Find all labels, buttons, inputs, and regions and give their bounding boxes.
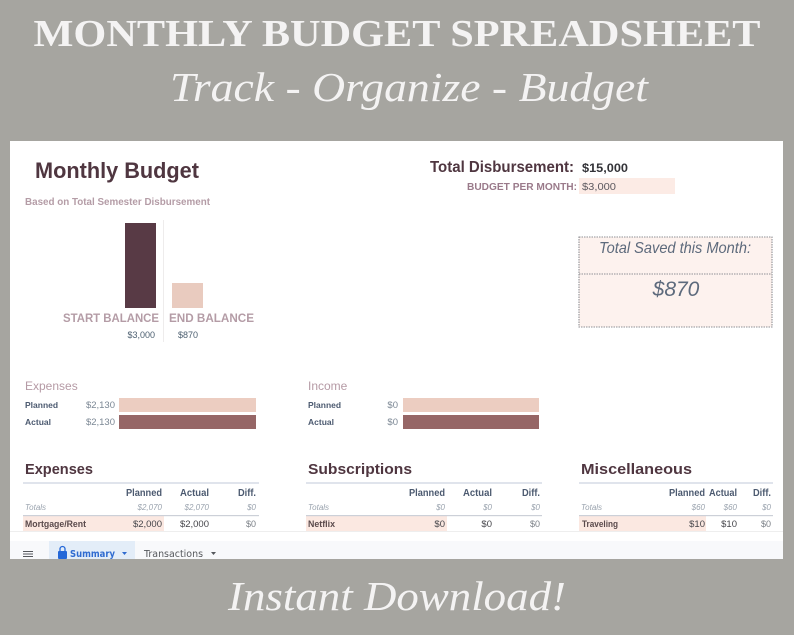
table: miscellaneous: $0	[761, 503, 772, 512]
chart: start and end balance: START BALANCE	[63, 311, 159, 325]
table: miscellaneous: Traveling	[582, 519, 618, 529]
chart: start and end balance: END BALANCE	[169, 311, 254, 325]
total disbursement: $15,000	[582, 161, 628, 175]
chart: income planned vs actual: $0	[387, 400, 398, 411]
panel: spreadsheet	[10, 141, 783, 560]
table: subscriptions: $0	[481, 519, 492, 530]
table: subscriptions: Planned	[409, 488, 445, 499]
table: subscriptions: $0	[435, 503, 446, 512]
table: subscriptions: Actual	[463, 488, 492, 499]
subheading: disbursement basis: Based on Total Semester Disbursement	[25, 197, 211, 208]
chart: expenses planned vs actual: Planned	[25, 400, 58, 410]
table: subscriptions: Subscriptions	[308, 461, 412, 478]
table: expenses: $0	[246, 503, 257, 512]
chart: income planned vs actual: Planned	[308, 400, 341, 410]
table: expenses: $2,070	[184, 503, 210, 512]
table: miscellaneous: $60	[723, 503, 738, 512]
table: miscellaneous: Diff.	[753, 488, 771, 499]
chart: income planned vs actual: Income	[308, 379, 348, 393]
chart: start and end balance	[63, 220, 254, 342]
table: miscellaneous: $60	[691, 503, 706, 512]
table: miscellaneous: $0	[761, 519, 771, 529]
callout: total saved this month: Total Saved this Month:	[599, 240, 751, 257]
table: expenses	[23, 461, 259, 531]
budget per month: $3,000	[582, 181, 616, 193]
icon: lock	[58, 546, 67, 559]
table: expenses: $0	[246, 519, 256, 529]
chart: start and end balance: $870	[178, 330, 198, 340]
chart: expenses planned vs actual: $2,130	[86, 417, 115, 428]
chart: income planned vs actual	[308, 379, 539, 429]
table: expenses: Planned	[126, 488, 162, 499]
heading: monthly budget: Monthly Budget	[35, 158, 200, 183]
table: subscriptions	[306, 461, 542, 531]
budget per month	[467, 178, 675, 194]
sheet tab bar	[10, 531, 783, 560]
chart: expenses planned vs actual: Expenses	[25, 379, 78, 393]
chart: income planned vs actual: $0	[387, 417, 398, 428]
table: subscriptions: Netflix	[308, 519, 335, 529]
title: MONTHLY BUDGET SPREADSHEET	[34, 13, 760, 55]
subtitle: Track - Organize - Budget	[170, 64, 650, 110]
table: expenses: Totals	[25, 503, 46, 512]
table: miscellaneous	[579, 461, 773, 531]
table: expenses: $2,070	[137, 503, 163, 512]
callout: total saved this month: $870	[652, 278, 700, 301]
budget per month: BUDGET PER MONTH:	[467, 181, 577, 193]
chart: expenses planned vs actual: Actual	[25, 417, 51, 427]
table: subscriptions: $0	[482, 503, 493, 512]
table: subscriptions: $0	[530, 519, 540, 529]
table: expenses: $2,000	[133, 519, 162, 530]
table: miscellaneous: Planned	[669, 488, 705, 499]
chart: expenses planned vs actual	[25, 379, 256, 429]
table: miscellaneous: Actual	[709, 488, 737, 499]
icon: menu	[23, 551, 33, 557]
table: expenses: Mortgage/Rent	[25, 519, 86, 529]
table: miscellaneous: Miscellaneous	[581, 461, 692, 478]
table: miscellaneous: $10	[689, 519, 705, 530]
sheet tab bar: Summary	[70, 549, 116, 560]
chart: start and end balance: $3,000	[127, 330, 155, 340]
call to action: Instant Download!	[227, 573, 566, 619]
chart: expenses planned vs actual: $2,130	[86, 400, 115, 411]
table: subscriptions: $0	[530, 503, 541, 512]
table: subscriptions: $0	[434, 519, 445, 530]
table: expenses: Diff.	[238, 488, 256, 499]
table: expenses: Actual	[180, 488, 209, 499]
sheet tab bar: Transactions	[143, 549, 203, 560]
table: expenses: $2,000	[180, 519, 209, 530]
table: subscriptions: Totals	[308, 503, 329, 512]
chart: income planned vs actual: Actual	[308, 417, 334, 427]
table: miscellaneous: Totals	[581, 503, 602, 512]
table: miscellaneous: $10	[721, 519, 737, 530]
total disbursement: Total Disbursement:	[430, 159, 574, 176]
table: expenses: Expenses	[25, 461, 93, 478]
callout: total saved this month	[579, 237, 772, 327]
table: subscriptions: Diff.	[522, 488, 540, 499]
